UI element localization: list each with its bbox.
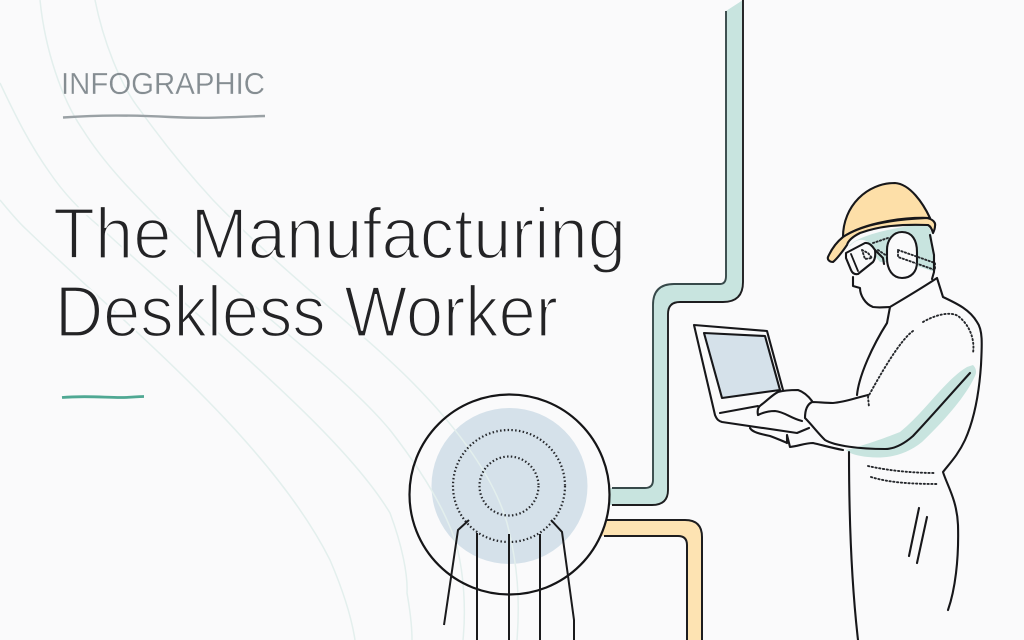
dotted coat seams — [868, 314, 973, 484]
ear muff — [887, 232, 917, 278]
dotted goggle strap and muff band — [862, 238, 935, 270]
teal hair — [849, 223, 935, 272]
yellow pipe — [600, 520, 702, 640]
dial outer ring — [410, 394, 610, 594]
coat arm and cuff — [805, 373, 970, 449]
goggles — [846, 243, 875, 274]
coat front edge — [849, 452, 858, 640]
worker — [694, 183, 982, 640]
hat brim — [828, 218, 935, 262]
white patch above goggles — [850, 240, 872, 248]
head and face — [930, 235, 934, 279]
teal pipe — [610, 0, 743, 505]
laptop screen — [704, 333, 780, 398]
hard hat — [843, 183, 930, 237]
open laptop — [694, 325, 809, 433]
title accent line — [62, 396, 144, 398]
coat pocket lines — [909, 508, 927, 563]
title — [53, 194, 626, 352]
label: INFOGRAPHIC: INFOGRAPHIC — [61, 66, 265, 101]
title: The Manufacturing — [53, 194, 626, 274]
dial blue disc — [432, 408, 588, 564]
coat body — [857, 278, 982, 610]
label underline — [63, 116, 265, 118]
title: Deskless Worker — [55, 272, 558, 352]
upper hand — [758, 390, 812, 421]
dial cables — [444, 520, 574, 640]
laptop keyboard edge — [720, 406, 758, 413]
dotted rings — [453, 430, 565, 542]
teal arm shadow — [846, 365, 976, 458]
lower hand — [750, 428, 843, 450]
dial backing — [410, 394, 610, 594]
